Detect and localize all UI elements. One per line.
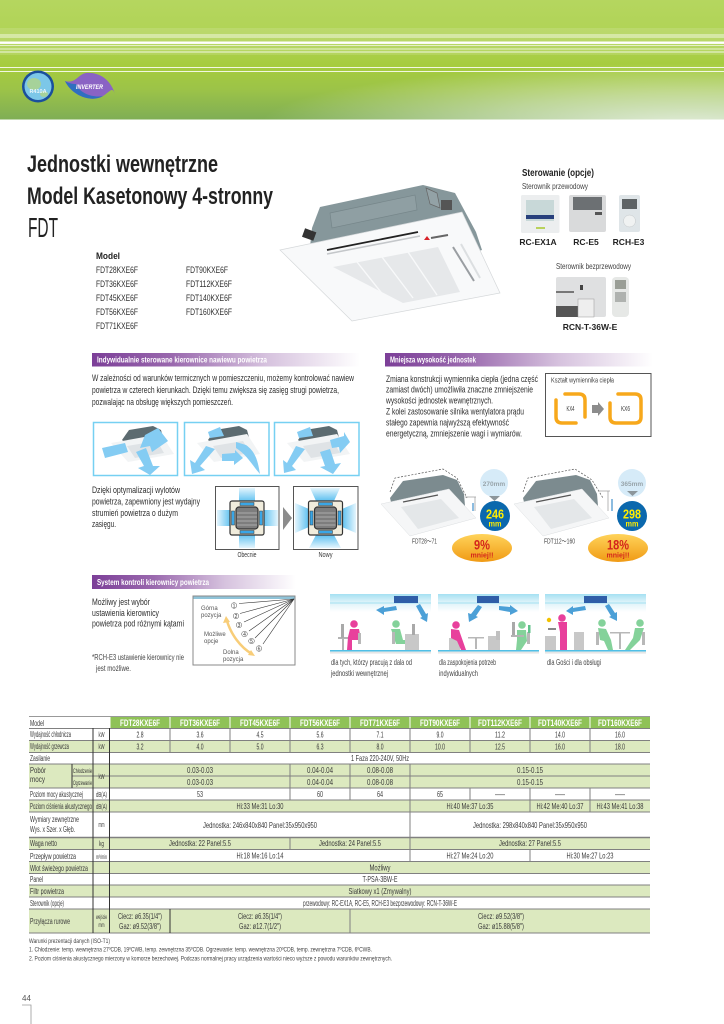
callout: 365mm: 365mm: [621, 481, 643, 488]
callout: 9% less: [452, 534, 512, 562]
diagram: new airflow: Nowy: [318, 550, 333, 559]
table: units: m³/min: [96, 855, 107, 861]
table: values: Ciecz: ø6.35(1/4"): [118, 911, 162, 921]
text: louvers intro: [92, 373, 354, 408]
table: row labels: Waga netto: [30, 839, 57, 848]
table: values: Ciecz: ø9.52(3/8"): [478, 911, 524, 921]
model list: FDT28KXE6F: [96, 265, 138, 276]
icon: inverter logo: INVERTER: [76, 85, 104, 91]
icon: RC-EX1A controller: [521, 195, 560, 233]
table: row labels: Filtr powietrza: [30, 887, 64, 896]
table: row labels: Przepływ powietrza: [30, 852, 76, 861]
diagram: louver positions: 4: [243, 632, 246, 638]
page number: 44: [22, 994, 31, 1003]
scene: individual needs: [438, 594, 539, 654]
callout: 365mm: [618, 469, 646, 497]
diagram: louver positions: 1: [233, 604, 236, 610]
table: values: Hi:40 Me:37 Lo:35: [446, 801, 494, 811]
unit: FDT112-160 height: [514, 469, 612, 546]
table: row labels: Wydajność grzewcza: [30, 742, 69, 751]
title: Model Kasetonowy 4-stronny: [27, 183, 273, 210]
table: model headers: FDT90KXE6F: [420, 718, 460, 728]
table: values: Hi:43 Me:41 Lo:38: [596, 801, 644, 811]
text: louver angle: Możliwy jest wybór: [92, 597, 150, 608]
table: row bands: [29, 741, 650, 933]
table: grid lines: [29, 716, 650, 933]
table: values: Gaz: ø12.7(1/2"): [239, 921, 281, 931]
table: values: Hi:33 Me:31 Lo:30: [236, 801, 284, 811]
icon: R410A badge: [22, 70, 54, 102]
scene: guests and staff: [545, 594, 646, 654]
table: values: Hi:30 Me:27 Lo:23: [566, 850, 614, 860]
table: values: Hi:18 Me:16 Lo:14: [236, 850, 284, 860]
table: values: Hi:42 Me:40 Lo:37: [536, 801, 584, 811]
table: model headers: FDT36KXE6F: [180, 718, 220, 728]
table: row labels: Sterownik (opcje): [30, 899, 64, 908]
text: louvers intro: W zależności od warunków termicznych w pomieszczeniu, możemy kontrolować nawiew: [92, 373, 354, 384]
table: values: Jednostka: 246x840x840 Panel:35x950x950: [203, 820, 317, 830]
table: values: —: [555, 789, 566, 799]
table: values: 0.03-0.03: [187, 777, 213, 787]
table: values: 0.08-0.08: [367, 765, 393, 775]
title: Jednostki wewnętrzne: [27, 151, 218, 178]
table: values: 0.15-0.15: [517, 777, 543, 787]
image: airflow 3: [274, 422, 359, 476]
text: lower height: Zmiana konstrukcji wymiennika ciepła (jedna część: [386, 374, 538, 385]
diagram: louver positions: Dolna: [223, 650, 239, 656]
caption: scene 2: indywidualnych: [439, 668, 478, 678]
table: row labels: Poziom mocy akustycznej: [30, 790, 83, 799]
table: values: 6.3: [316, 742, 324, 752]
table: model headers: FDT160KXE6F: [598, 718, 642, 728]
callout: 18% less: mniej!!: [606, 550, 630, 560]
table: row labels: Wydajność chłodnicza: [30, 730, 71, 739]
page number: [22, 994, 31, 1024]
table: units: kW: [98, 732, 105, 739]
model list: FDT56KXE6F: [96, 307, 138, 318]
text: lower height: energetyczną, zmniejszenie wagi i wymiarów.: [386, 428, 522, 440]
table: values: 8.0: [376, 742, 384, 752]
table: model headers: [120, 718, 642, 728]
text: lower height: zamiast dwóch) umożliwiła znaczne zmniejszenie: [386, 384, 533, 396]
table: row labels: [30, 719, 92, 926]
text: lower height: Z kolei zastosowanie silnika wentylatora prądu: [386, 406, 524, 418]
icon: KX4 exchanger: KX4: [566, 404, 574, 413]
table: values: 0.08-0.08: [367, 777, 393, 787]
callout: 9% less: mniej!!: [470, 550, 494, 560]
diagram: louver positions: pozycja: [201, 613, 222, 619]
diagram: new airflow: [294, 486, 358, 559]
callout: 270mm: [480, 469, 508, 501]
table: row labels: Ogrzewanie: [73, 781, 92, 787]
text: optimised outlets: strumień powietrza o dużym: [92, 508, 178, 519]
table: values: Siatkowy x1 (Zmywalny): [348, 886, 412, 896]
table: values: T-PSA-3BW-E: [362, 874, 398, 884]
table: specifications: [29, 716, 650, 933]
callout: 9% less: 9%: [474, 536, 490, 552]
model list: FDT90KXE6F: [186, 265, 228, 276]
text: louver angle: [92, 597, 184, 630]
callout: 298 mm: mm: [626, 520, 638, 528]
table: values: 0.15-0.15: [517, 765, 543, 775]
table: values: 11.2: [495, 730, 505, 740]
table: values: 14.0: [555, 730, 565, 740]
callout: 18% less: [588, 534, 648, 562]
panel: controllers: RC-E5: [573, 237, 599, 247]
table: values: 5.0: [256, 742, 264, 752]
table: values: 18.0: [615, 742, 625, 752]
arrow: current to new: [283, 507, 292, 530]
table: units: kg: [99, 841, 104, 848]
diagram: louver positions: [193, 596, 295, 665]
icon: RCH-E3 controller: [619, 195, 640, 232]
header banner: [0, 0, 724, 120]
panel: controllers: RCH-E3: [613, 237, 645, 247]
text: louver angle: ustawienia kierownicy: [92, 608, 159, 619]
table: model headers: FDT140KXE6F: [538, 718, 582, 728]
table: row labels: Zasilanie: [30, 754, 50, 763]
callout: 298 mm: 298: [623, 506, 641, 522]
caption: scene 3: dla Gości i dla obsługi: [547, 657, 601, 667]
table: units: [95, 732, 107, 929]
text: optimised outlets: zasięgu.: [92, 519, 116, 530]
section bar: louvers: Indywidualnie sterowane kierownice nawiewu powietrza: [97, 354, 267, 364]
text: louvers intro: powietrza w czterech kierunkach. Dzięki temu zwiększa się zasięg strugi powietrza,: [92, 385, 339, 396]
icon: R410A badge: R410A: [29, 89, 47, 95]
table: values: 0.04-0.04: [307, 765, 333, 775]
unit: FDT28-71 height: [381, 469, 476, 546]
text: optimised outlets: powietrza, zapewniony jest wydajny: [92, 496, 200, 508]
panel: heat exchanger shape: [546, 374, 651, 436]
diagram: louver positions: 2: [235, 614, 238, 620]
text: optimised outlets: Dzięki optymalizacji wylotów: [92, 485, 180, 496]
diagram: louver positions: Górna: [201, 606, 218, 612]
table: values: Gaz: ø15.88(5/8"): [478, 921, 524, 931]
table: model headers: FDT45KXE6F: [240, 718, 280, 728]
footnotes: 2. Poziom ciśnienia akustycznego mierzony w komorze bezechowej. Podczas normalnej pracy urządzenia wartości nieco wyższe z powodu warunków zewnętrznych.: [29, 956, 392, 962]
panel: controllers: Sterowanie (opcje): [522, 168, 594, 179]
table: values: 3.2: [136, 742, 144, 752]
text: optimised outlets: [92, 485, 200, 530]
table: values: Jednostka: 298x840x840 Panel:35x950x950: [473, 820, 587, 830]
diagram: louver positions: pozycja: [223, 657, 244, 663]
diagram: louver positions: 5: [250, 639, 253, 645]
model list: Model: [96, 251, 120, 262]
section bar: lower height: [385, 353, 653, 366]
table: units: dB(A): [96, 804, 107, 811]
image: airflow 1: [94, 422, 178, 476]
table: header cells: [110, 717, 650, 728]
table: row labels: Model: [30, 719, 44, 728]
section bar: louver control: [92, 575, 296, 589]
note: RCH-E3: *RCH-E3 ustawienie kierownicy nie: [92, 652, 184, 662]
table: values: 9.0: [436, 730, 444, 740]
table: row labels: Przyłącza rurowe: [30, 917, 70, 926]
table: values: Jednostka: 27 Panel:5.5: [499, 838, 561, 848]
table: row labels: Chłodzenie: [73, 769, 92, 775]
callout: 270mm: 270mm: [483, 481, 505, 488]
table: row labels: Wlot świeżego powietrza: [30, 864, 88, 873]
table: model headers: FDT56KXE6F: [300, 718, 340, 728]
table: values: Możliwy: [370, 862, 391, 872]
table: values: 65: [437, 789, 443, 799]
table: values: 4.5: [256, 730, 264, 740]
diagram: current airflow: Obecnie: [238, 550, 256, 559]
table: units: mm: [98, 922, 104, 929]
table: values: 7.1: [376, 730, 384, 740]
table: row labels: Poziom ciśnienia akustycznego: [30, 802, 92, 811]
section bar: louver control: System kontroli kierownicy powietrza: [97, 577, 209, 587]
model list: FDT45KXE6F: [96, 293, 138, 304]
product: cassette unit: [280, 185, 500, 321]
panel: controllers: Sterownik przewodowy: [522, 181, 589, 191]
footnotes: [29, 938, 392, 962]
table: values: 16.0: [615, 730, 625, 740]
unit: FDT112-160 height: FDT112～160: [544, 538, 575, 546]
table: row labels: mocy: [30, 775, 45, 784]
table: values: 16.0: [555, 742, 565, 752]
table: values: 60: [317, 789, 323, 799]
table: row labels: Wys. x Szer. x Głęb.: [30, 825, 75, 834]
model list: FDT140KXE6F: [186, 293, 232, 304]
table: values: Hi:27 Me:24 Lo:20: [446, 850, 494, 860]
table: row labels: Pobór: [30, 766, 46, 775]
text: lower height: wysokości jednostek wewnętrznych.: [385, 396, 493, 406]
table: units: dB(A): [96, 792, 107, 799]
diagram: current airflow: [216, 486, 279, 559]
table: values: 4.0: [196, 742, 204, 752]
caption: scene 1: jednostki wewnętrznej: [330, 668, 388, 678]
caption: scene 1: [330, 657, 412, 678]
note: RCH-E3: [92, 652, 184, 673]
table: values: —: [615, 789, 626, 799]
note: RCH-E3: jest możliwe.: [95, 663, 131, 673]
callout: 246 mm: 246: [486, 506, 504, 522]
title: FDT: [28, 212, 58, 243]
model list: FDT112KXE6F: [186, 279, 232, 290]
panel: controllers: [519, 168, 645, 332]
icon: KX6 exchanger: KX6: [621, 404, 630, 413]
table: model headers: FDT112KXE6F: [478, 718, 522, 728]
panel: controllers: RCN-T-36W-E: [563, 322, 618, 332]
diagram: louver positions: 6: [258, 646, 261, 652]
diagram: louver positions: 3: [238, 623, 241, 629]
panel: controllers: Sterownik bezprzewodowy: [556, 261, 632, 271]
table: units: wejście: [95, 914, 107, 921]
caption: scene 2: [439, 657, 496, 678]
table: values: [118, 730, 644, 931]
title: [27, 151, 273, 243]
callout: 18% less: 18%: [607, 536, 629, 552]
table: values: 0.03-0.03: [187, 765, 213, 775]
callout: 246 mm: [480, 501, 510, 531]
table: values: 2.8: [136, 730, 144, 740]
caption: scene 2: dla zaspokojenia potrzeb: [439, 657, 496, 667]
table: row labels: Panel: [30, 875, 43, 884]
panel: controllers: RC-EX1A: [519, 237, 557, 247]
section bar: louvers: [92, 353, 360, 366]
text: lower height: stałego zapewnia najwyższą efektywność: [386, 418, 509, 428]
table: model headers: FDT28KXE6F: [120, 718, 160, 728]
table: values: Jednostka: 22 Panel:5.5: [169, 838, 231, 848]
table: values: Gaz: ø9.52(3/8"): [119, 921, 161, 931]
text: louvers intro: pozwalając na obsługę większych pomieszczeń.: [92, 397, 233, 408]
unit: FDT28-71 height: FDT28～71: [412, 538, 437, 546]
table: units: kW: [98, 774, 105, 781]
diagram: louver positions: Możliwe: [204, 632, 226, 638]
table: model headers: FDT71KXE6F: [360, 718, 400, 728]
table: values: —: [495, 789, 506, 799]
model list: [96, 251, 232, 332]
table: values: 10.0: [435, 742, 445, 752]
model list: FDT71KXE6F: [96, 321, 138, 332]
table: units: mm: [98, 822, 105, 829]
table: values: 53: [197, 789, 203, 799]
model list: FDT160KXE6F: [186, 307, 232, 318]
table: row labels: Wymiary zewnętrzne: [30, 815, 79, 824]
panel: heat exchanger shape: Kształt wymiennika ciepła: [551, 376, 615, 384]
image: airflow 2: [184, 422, 269, 476]
table: values: 5.6: [316, 730, 324, 740]
text: lower height: [385, 374, 538, 440]
caption: scene 1: dla tych, którzy pracują z dala od: [331, 657, 412, 667]
table: values: Jednostka: 24 Panel:5.5: [319, 838, 381, 848]
callout: 246 mm: mm: [488, 520, 502, 528]
table: values: 64: [377, 789, 383, 799]
arrow: exchanger change: [592, 402, 604, 416]
icon: inverter logo: [65, 73, 115, 99]
footnotes: 1. Chłodzenie: temp. wewnętrzna 27ºCDB, 19ºCWB, temp. zewnętrzna 35ºCDB. Ogrzewanie: temp. wewnętrzna 20ºCDB, temp. zewnętrzna 7ºCDB, 6ºCWB.: [29, 946, 372, 954]
section bar: lower height: Mniejsza wysokość jednostek: [390, 354, 476, 364]
table: units: kW: [98, 744, 105, 751]
text: louver angle: powietrza pod różnymi kątami: [92, 618, 184, 630]
footnotes: Warunki prezentacji danych (ISO-T1): [29, 938, 110, 945]
table: values: Ciecz: ø6.35(1/4"): [238, 911, 282, 921]
callout: 298 mm: [617, 501, 647, 531]
table: values: 3.6: [196, 730, 204, 740]
table: values: 12.5: [495, 742, 505, 752]
icon: wireless receiver: [556, 277, 606, 317]
table: values: przewodowy: RC-EX1A, RC-E5, RCH-E3 bezprzewodowy: RCN-T-36W-E: [303, 898, 457, 908]
scene: working away from unit: [330, 594, 431, 654]
icon: wireless remote: [612, 277, 629, 317]
diagram: louver positions: opcje: [204, 639, 219, 645]
table: values: 0.04-0.04: [307, 777, 333, 787]
table: values: 1 Faza 220-240V, 50Hz: [351, 753, 409, 763]
model list: FDT36KXE6F: [96, 279, 138, 290]
icon: RC-E5 controller: [569, 195, 606, 232]
